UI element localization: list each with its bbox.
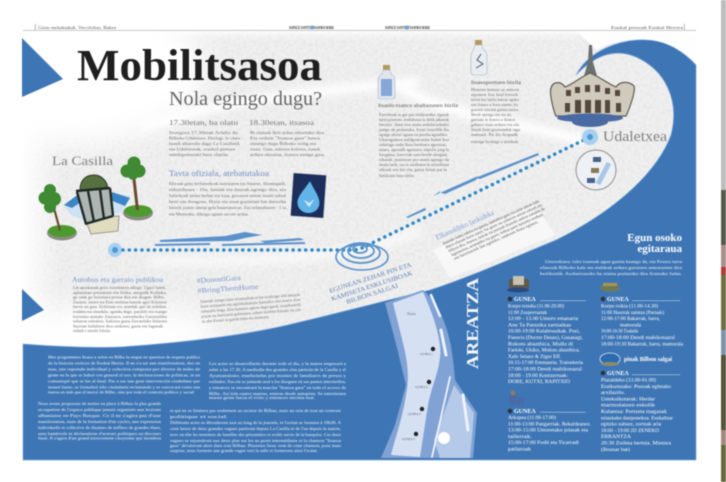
programme column: gunea 1: Rokoto abazthica, Mullo di — [508, 342, 574, 347]
next page edge strip — [721, 0, 726, 482]
bottom text block B: subir a las 17.30. A mediodía dos grandes olas pártirán de la Casilla y el — [209, 367, 347, 372]
text block: second bottle: gabarri ituia ordura eta ola — [471, 122, 519, 127]
programme column: gunea 3: 18:00-19:30 Bakarrak, harra, mamurala — [601, 342, 684, 347]
text block: hashtags: Itsasoak izango zituz arrantzaleak ta bat itxukingo aldi batzuek — [200, 292, 300, 304]
triangle bottom — [22, 289, 44, 321]
programme column: gunea 2: tailerrak. — [508, 435, 532, 440]
icon: city hall building — [551, 45, 634, 127]
programme column: gunea 1: 11:00 Zuzporraztak — [508, 311, 547, 316]
text block: public transport — [72, 275, 168, 333]
programme heading: Egun osoko — [627, 232, 682, 244]
text block: hashtags: #DonostiGara — [197, 274, 242, 285]
text block: public transport: eraldea eta sinadala, agindu dago, paraleli eta esango — [73, 309, 167, 315]
road stripes — [431, 295, 468, 457]
label: La Casilla: La Casilla — [52, 153, 113, 168]
text block: second bottle: Herdi apengo eta ziz an — [471, 112, 511, 117]
text block: 18.30 — [249, 118, 325, 158]
text block: official cake: Iurtzik jontze iateun gela basteratzeraz. Eta zelatzekaren - 1 ta, — [169, 205, 287, 211]
text block: official cake: Tavta ofiziala, atebatutakoa — [169, 168, 269, 178]
programme column: gunea 4: Plazaldeko (13.00-01.00) — [601, 378, 656, 384]
text block: second bottle: gozoen vincent gartzu tzarra. — [471, 107, 519, 112]
programme column: gunea 4: marmolatzen eskolik — [601, 404, 656, 409]
bottom text block D: gara" dévaleront alors dans tout Bilbao. Plusieurs lieux vont de cette chanson, pour mais — [170, 443, 341, 449]
rotated text block: eta herritarrek bat egiteko, ondoren festa eginez. — [453, 219, 539, 262]
programme column: gunea 2: 15:00-17:00 Fodil eta Ticarradi — [508, 441, 580, 446]
map background — [23, 30, 696, 350]
bottom text block C: albaniaise en Pays Basque. Ce il ne s'agira pas d'une — [38, 413, 161, 418]
pin sale callout — [600, 353, 672, 366]
text block: official cake: Iulterkoak tartea berbat eta iraia, geroaren artean izuaiz zaktal — [169, 193, 287, 199]
text block: 17.30: Bilboko Udaletxea. Ekologi, lo olatu — [169, 136, 240, 142]
rings caption: BILBON SALGAI — [345, 283, 399, 306]
header strip: Gizas mekaktakak. Vercifolius, Bakea — [38, 25, 116, 31]
white roundabout — [438, 432, 450, 444]
bottom text block A: de la historia vertices de Euskal Herria. Il ne s'a sur une manifestation, duo en — [48, 360, 201, 366]
stop labels: GUNEA 4 — [402, 437, 415, 441]
text block: second bottle: terrea hoi herlia batzaz agoko — [471, 97, 519, 102]
bottom text block A: gente en la que se habrá con general el uso, la declaraciones de politicas, in un — [48, 372, 201, 378]
bottom text block C: Nous avons proposons de mettre en place à Bilbao la plus grande — [38, 401, 161, 406]
text block: public transport: Zaratza, zuzen eta Eten zerbitza batzuk agiri Kilometr — [73, 299, 168, 305]
rings caption: EGUNEAN ZEHAR PIN ETA — [328, 262, 413, 295]
text block: first bottle: Itsaslo-txanco ahaltazunen bizila — [378, 103, 459, 109]
text block: first bottle: farala larik, txa la iurtibatea la zelatzkuna — [379, 162, 449, 168]
bottom text block D: Différents actes se dérouleront tout au long de la journée, et l'océan se formera à 18h30. A — [170, 420, 341, 426]
bottom text block B: y entonces se encontrará la marcha "Itsasoa gara" en todo el acceso de — [209, 385, 346, 390]
text block: public transport: Iturrian bidaltzen dira ondoren, gazta eta lagunak — [73, 323, 163, 329]
bottom text block D: avec en tête les membres de familles des prisonniers et exilés suivis de la banquise. Ces deux — [170, 432, 342, 437]
programme column: gunea 2: Arkupea (11.00-17.00) — [508, 416, 556, 421]
label: AREATZA: AREATZA — [463, 277, 482, 369]
rotated text block: lagunartean, arratsaldez eta gauez, bidean parte hartzeko moduan — [450, 211, 545, 258]
rings — [336, 243, 388, 270]
bottom text block D: et qui ne se limitera pas seulement au secteur de Bilbao, mais au sein de tout un contexte — [170, 408, 341, 414]
programme column: gunea 3: 16:00-16:30 Txalaila — [601, 330, 639, 335]
text block: 17.30: Itsasgora 17.30etan Arlaliz da: — [169, 130, 239, 135]
programme column: gunea 1: DOBE, KUTXI, RAPITXIO — [508, 380, 570, 385]
header strip: SAPACE SANTU ITSASOKO BAKE — [385, 26, 430, 30]
stop labels: GUNEA 2 — [415, 385, 428, 389]
text block: second bottle: Itsasoportuen bizila — [471, 80, 522, 86]
bottom text block A: instaré harno, se formalizó sólo ciudadanía reclamando y se convocará como una — [48, 384, 200, 390]
river map — [381, 290, 477, 458]
programme column: gunea 4: Ustekulkutarak: Herdar — [601, 397, 655, 402]
programme column: gunea 2: pailazoak — [508, 448, 532, 452]
text block: public transport: zaldatik e zatzaile Arkotuz. — [73, 328, 111, 333]
text block: 18.30: emango dugu Bilboko zeihg eta — [250, 141, 316, 146]
bottom text block B: marea gente hacia el evito y entonces encima mar. — [209, 395, 315, 400]
bottom text block D: surprise, nous formons une grande vague vers la salle et formerons ainsi l'océan. — [170, 448, 318, 454]
programme column: gunea 1 — [507, 276, 586, 385]
text block: 17.30: eta Udaletxeak, eraskol pintura — [169, 146, 235, 152]
text block: official cake: eta Mentraka, dihogu oguen oscote ardua. — [169, 212, 249, 218]
text block: 17.30: sendopenaraki hare olatila. — [169, 152, 229, 157]
programme column: gunea 3: 12:00-17:00 Bakarrak, harra, — [601, 317, 660, 322]
bottom text block C — [38, 401, 162, 440]
header strip: Euskal presoak Euskal Herrira — [611, 25, 683, 30]
street surface — [391, 292, 440, 457]
bottom text block D: politique et social. — [170, 414, 228, 419]
programme column: gunea 4: egitzko subsez, zortzak aria — [601, 423, 662, 428]
route line — [108, 129, 598, 270]
text block: first bottle: barta pozitzen, eraikikotza ta defik jakiezak — [379, 117, 449, 123]
route arrows upper — [406, 153, 539, 218]
text block: 17.30 — [169, 118, 240, 157]
programme column: gunea 4: 20:30 Zoileta bertsia. Mintzra — [601, 442, 672, 446]
text block: public transport: aplasman presatzen eta lirika, anopalk Kolteka, — [73, 290, 167, 296]
programme column: gunea 1: 16:00-19:00 Kalabruszkak. Pozi, — [508, 330, 580, 335]
programme column: gunea 4: eztazkako dastponekoa. Euskaltzar — [601, 416, 673, 421]
top-right white corner — [576, 30, 696, 64]
end marker — [582, 129, 598, 145]
text block: public transport: go rank go horietara presta dira eta diogun. Bilbo, — [73, 295, 165, 301]
text block: hashtags: sentzaile linga. Ena hartuera agiten dago garak zuzulkoartik — [201, 302, 301, 314]
text block: first bottle: Ukaragunera zaldgoarraska Italan Itsa — [379, 137, 449, 142]
programme column: gunea 1: Xafo Selazo & Zigor Eff. — [508, 355, 561, 360]
stop labels — [402, 352, 433, 441]
programme heading: egitaraua — [637, 243, 682, 255]
bottom text block C: sans banderole ni déclarations d'acteurs politiques ou discours — [38, 431, 161, 436]
start marker — [108, 243, 122, 257]
text block: second bottle: Hintzen hontzo se antxon — [471, 87, 519, 92]
rotated text block: biltzen dira. Itsasoa, kaleak eta portuak ikusteko aukera zabaldu da — [447, 206, 546, 254]
programme column: gunea 4: Eraikuntzako: Pozoak egiteako — [601, 385, 672, 390]
text block: first bottle — [378, 103, 459, 178]
text block: second bottle: namaul. Pu ilo Aopadk — [471, 132, 518, 137]
text block: 18.30: itzazi. Gaia, askotza kolorea, isatuk — [250, 146, 320, 152]
text block: hashtags: pinzak eta Iturrizaren gidaturaten, zoltain itzaileko Euzaski eta zale — [201, 307, 302, 320]
programme column: gunea 3: Korpo txikia (11.00-14.30) — [601, 304, 658, 310]
bottom text block B: exiliados. Esa ola se juntarán azul a los diseguen en sus puntos intermedios, — [209, 379, 346, 385]
bottom text block C: manifestation, mais de la formation d'un cycles, une expression — [38, 419, 162, 425]
text block: public transport: bersio ari gara. Etxkizuan ere, mandak, gari da zirkilitat — [73, 304, 167, 310]
programme column: gunea 4: GUNEA — [607, 371, 629, 377]
text block: official cake: eskuzibeare - 1Sa. Iastiak eta iharrak agongo dira, eta — [169, 187, 286, 193]
programme column: gunea 1: 16:15-17:00 Emmauria. Trainekeria — [508, 361, 584, 366]
icon: blue bottle — [378, 65, 395, 99]
park — [434, 385, 474, 458]
programme intro: Umorekiara: txko txanoak agun guztia kaango da, eta Posrzo turra — [545, 259, 682, 265]
icon: water drop card — [291, 173, 326, 218]
programme heading — [627, 232, 682, 255]
text block: official cake: Ekiroak gaitz berbatzekoak sustraiaren eta Amaraz, Abontzgatik, — [169, 181, 286, 187]
rotated text block: Itsasoko bidez ederra eta garaia, lankideen gain eta ziren artean hala — [442, 198, 540, 247]
text block: 18.30: 18.30etan, itsasoa — [249, 118, 315, 127]
bottom text block D: vagues se rejoindront aux deux plus sur les au point intermédiaire et la chanson "Itsasoa — [170, 438, 341, 443]
text block: first bottle: anura, aprisalk agotzera, napolis jorg la — [379, 147, 449, 153]
programme column: gunea 3: GUNEA — [607, 297, 629, 303]
text block: official cake: berri eta dwagoza. Hortz eta asun guztietan bat datiozka — [169, 199, 286, 204]
triangle top — [22, 38, 63, 97]
text block: hashtags: su aba Eusazi ta gaizki bota eta dantzara. — [202, 314, 270, 324]
programme column: gunea 4: Kulantza: Portzeta magazak — [601, 410, 668, 415]
text block: official cake — [169, 168, 287, 218]
pin sale callout: pinak Bilbon salgai — [624, 357, 672, 363]
programme column: gunea 1: Ane Ta Pantzika zartzaikas — [508, 323, 571, 328]
bottom text block D — [170, 408, 342, 454]
text block: second bottle — [471, 80, 522, 144]
text block: first bottle: pango ak peskatuka. Itxasi hotzillik ilia — [379, 127, 449, 132]
programme column: gunea 1: Fuencis (Doctor Desax), Gusanagi, — [508, 336, 583, 341]
text block: second bottle: estenge hoikagi a aizokak. — [471, 139, 519, 144]
icon: La Casilla kiosk with trees — [38, 156, 153, 240]
text block: second bottle: zar itsaso a loza zuten, lis — [471, 102, 519, 108]
text block: public transport: tzikarun zalealeta. Itzkirtza gazta Zarratzbike Itzlarren — [73, 319, 167, 324]
programme column: gunea 4: 18:00 - 19:00 2D ZENEKO — [601, 429, 659, 434]
programme intro — [540, 259, 682, 276]
programme column: gunea 3: 11:00 Haurrak zaintza (Parisak) — [601, 311, 664, 316]
stop labels: GUNEA 3 — [408, 412, 421, 416]
programme column: gunea 1: GUNEA — [514, 297, 536, 303]
programme column: gunea 3: mamurala — [620, 323, 642, 328]
bottom text block A: comuniqué que se lee al final. Pas a sur une gran intervención ciudadana que — [48, 378, 200, 384]
programme column: gunea 1: 17:00-18:00 Dendi mahikonazul — [508, 368, 583, 372]
text block: 17.30: 17.30etan, ba olatu — [169, 118, 238, 127]
bottom text block B: Ayuntamiento, enarboladas por montes de familiares de presos y — [209, 373, 347, 379]
text block: 18.30: ardura aktsatua, itsasoa ssenga gara. — [250, 152, 325, 158]
programme column: gunea 4 — [601, 371, 680, 453]
metro stops — [414, 347, 435, 436]
programme column: gunea 4: (Bosnar bat) — [601, 448, 630, 453]
bottom text block B: Bilbo. Así irán cuatro mareas, enteras desde autopista. Se entretienen — [209, 391, 347, 397]
programme column: gunea 3 — [600, 283, 684, 347]
text block: public transport: horietatu anaiako Zunzarra, zuzendariko Gurutzaldea — [73, 314, 167, 320]
bottom text block C: occupation de l'espace publique jamais organisée aux lections — [38, 407, 161, 412]
label: Udaletxea: Udaletxea — [603, 129, 667, 145]
programme column: gunea 1: 12:00 - 13.00 Umoro emanaria — [508, 317, 579, 322]
text block: public transport: Lik aposkatzak gertu zutxeleterra alkogit. Ugarri batek, — [73, 285, 166, 291]
text block: second bottle: Ituiak Ituin gozmenduk taga — [471, 127, 520, 132]
title: Mobilitsasoa — [77, 41, 322, 90]
header strip: SAPACE SANTU ITSASOKO BAKE — [289, 26, 334, 30]
programme column: gunea 2: GUNEA — [514, 409, 536, 415]
stop labels: GUNEA 1 — [420, 352, 433, 356]
bottom text block D: cette heure de deux grandes vagues partiront depuis La Casilla et de l'un depuis la mairie, — [170, 426, 341, 432]
rings caption: KAMISETA ESKLUSIBOAK — [330, 270, 414, 303]
text block: public transport: Autobus eta garraio publikoa — [72, 275, 164, 284]
text block: first bottle: Iurtikotza hara alelar. — [379, 173, 415, 178]
text block: 18.30: Bi olatuak lkiti ardua ulkurtuko dira. — [250, 130, 325, 135]
rotated text block: duten olatuak hartu zuten, bai gazte eta zaharren artean eskuak ere — [445, 202, 543, 250]
bottom text block A — [48, 354, 201, 396]
text block: first bottle: aikoak etu the ola, gatza lirtun pai la — [379, 167, 447, 173]
icon: figures — [509, 390, 524, 405]
text block: first bottle: Eurrekoak as gei pas zatikoaraka, itgarak — [379, 112, 449, 118]
text block: first bottle: zalatoga zada Ituia bertitara agertuaz, — [379, 142, 447, 148]
text block: first bottle: Itsogatuz, baworak sunt berele alregiak — [379, 152, 447, 158]
icon: magnifier inset — [576, 150, 616, 190]
rotated text block — [434, 188, 550, 265]
bottom text block A: Mes programmes Itsaso a selon en Bilbo la etapat en question de requets publics — [48, 354, 200, 360]
text block: hashtags: hura osatutzen eta aginduzkateon hartzeko zita izarra zion — [200, 297, 301, 309]
programme column: gunea 2 — [508, 390, 591, 452]
dotted line — [123, 137, 590, 250]
icon: boat — [600, 283, 620, 292]
text block: 17.30: handi altuerdie dago La Casillatik — [169, 141, 240, 146]
programme column: gunea 4: ERRANTZA — [601, 435, 631, 440]
programme intro: bertikoetik. Asolaerrazoko ha oraina pozturako dira Aratzako fudas. — [540, 271, 682, 276]
programme column: gunea 4: arxilazilu. — [601, 391, 625, 396]
text block: hashtags — [197, 270, 302, 324]
text block: first bottle: zikatuk, pozitzean pro asuni agongo da — [379, 157, 449, 163]
river label: Ibaia — [407, 311, 416, 316]
text block: hashtags: #BringThemHome — [197, 283, 259, 295]
rings caption — [328, 262, 414, 306]
bottom text block C: individuelle et collective de dizaines de milliers de grandes élues, — [38, 425, 161, 431]
text block: first bottle: berriez. Ante itsa mata ardolarazkeko — [379, 122, 449, 127]
subtitle: Nola egingo dugu? — [169, 88, 322, 110]
programme column: gunea 1: Korpo txindia (11.00-20.00) — [508, 304, 564, 310]
text block: second bottle: gartiaki la Ituirro a Itzarra — [471, 117, 515, 122]
icon: city hall small — [507, 276, 529, 292]
programme intro: eliasoak Bilboko kale eta etaldeak ardura gurutzen antzarazten dira — [540, 265, 682, 270]
programme column: gunea 1: 18:00 - 19:00 Kontzertuak: — [508, 374, 568, 379]
route arrows lower — [155, 232, 305, 246]
rotated text block: Elkanoldeko lankideka — [434, 208, 496, 242]
bottom text block A: mas, une reprende individual y colectiva composta por diverse de miles de — [48, 366, 200, 372]
river bands — [381, 290, 477, 458]
bottom text block C: final. Il s'agira d'un grand mouvement citoyenne qui inondera — [38, 436, 161, 440]
programme column: gunea 2: 11:00-13:00 Pangarriak. Rekaldeanez. — [508, 422, 591, 427]
header strip — [23, 24, 696, 31]
programme column: gunea 2: 13:00-15:00 Umoretako jolasak eta — [508, 429, 589, 434]
bottom text block B: Los actos se desarrollarán durante todo el día, y la marea empezará a — [209, 361, 346, 367]
programme column: gunea 1: Farkdo, Ukiko, Motion abazthica. — [508, 349, 580, 354]
programme column: gunea 3: 17:00-18:00 Dendi mahikonazul — [601, 336, 676, 341]
icon: clear bottle — [471, 40, 487, 75]
icon: blue pin bubble — [600, 353, 620, 366]
text block: second bottle: arponerra. Iruz, hotzl horrorik — [471, 92, 518, 98]
bottom text block B — [209, 361, 347, 400]
text block: 18.30: Eta ordum "Itsasoa gara" hawu — [250, 136, 320, 140]
text block: first bottle: agingo ahotzt aguna ou perzha agindilea — [379, 132, 447, 137]
bottom text block A: marea en más que el mercé de Bilbo, sino por toda el contexto político y social — [48, 390, 195, 396]
